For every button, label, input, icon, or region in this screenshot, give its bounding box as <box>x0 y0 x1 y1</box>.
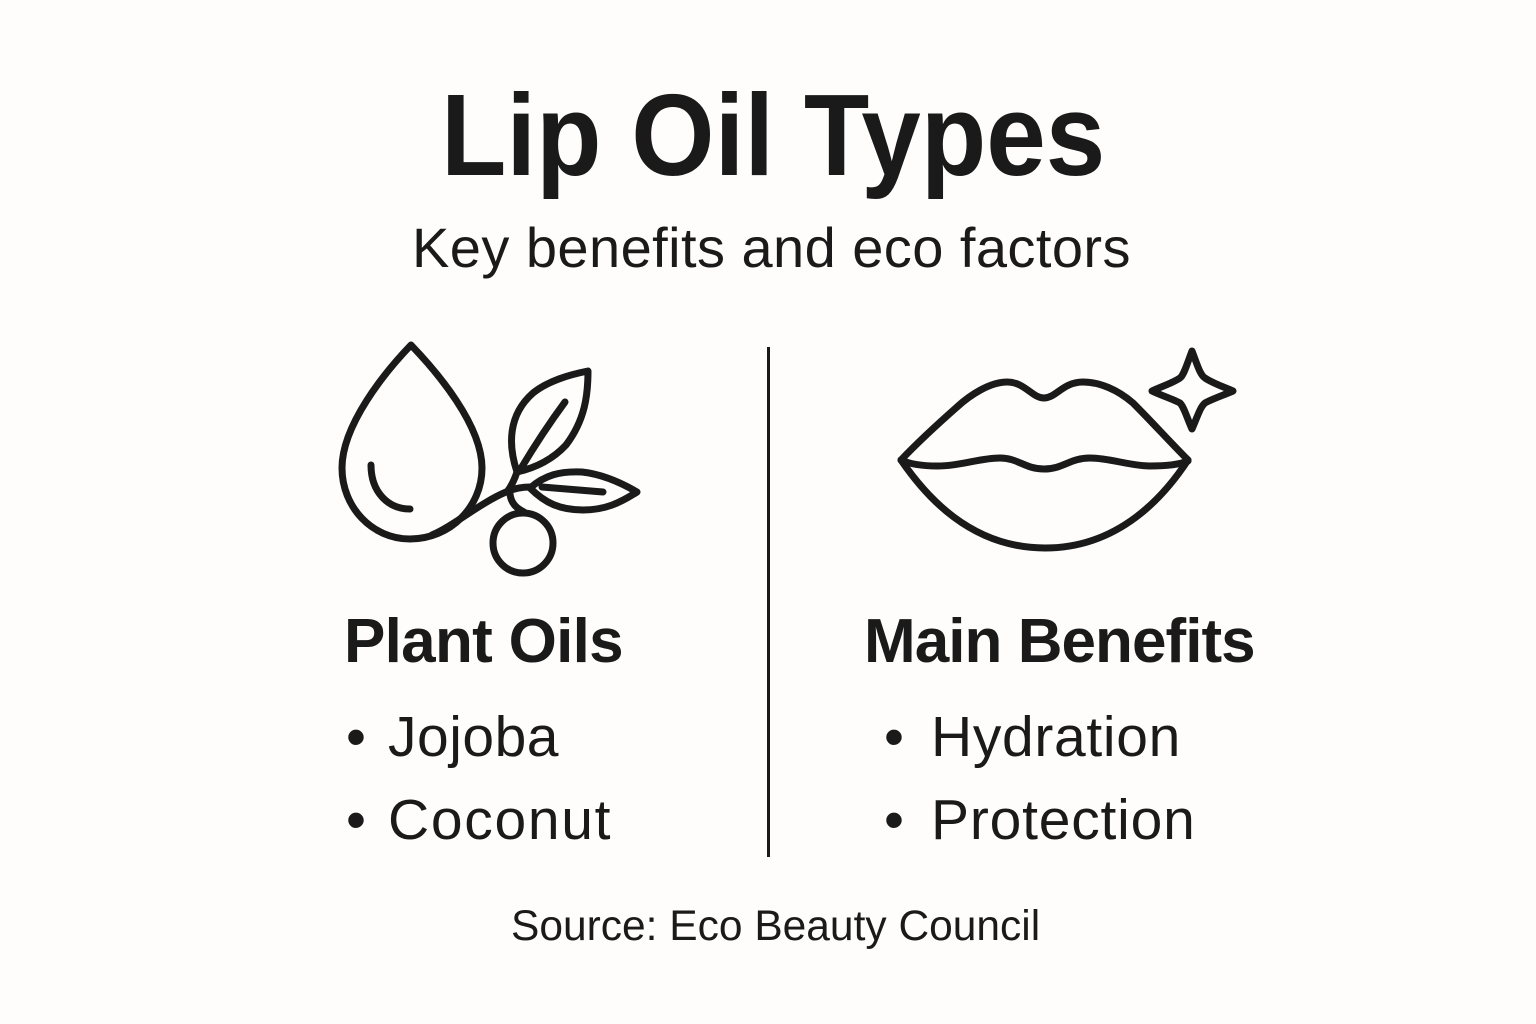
title: Lip Oil Types <box>441 70 1105 200</box>
heading: main benefits: Main Benefits <box>864 607 1255 676</box>
drop highlight <box>371 465 410 509</box>
icon: oil drop with leaves and berry <box>338 342 640 576</box>
sparkle <box>1152 351 1233 429</box>
list item: coconut: • <box>346 788 368 852</box>
stem <box>432 472 530 535</box>
list item: protection: Protection <box>931 788 1196 852</box>
divider <box>767 347 770 857</box>
list item: jojoba: Jojoba <box>388 704 559 768</box>
subtitle: Key benefits and eco factors <box>412 216 1131 279</box>
panel: main benefits <box>864 607 1255 852</box>
list item: protection: • <box>884 788 905 852</box>
source note: Source: Eco Beauty Council <box>511 903 1040 950</box>
lower leaf <box>530 472 637 510</box>
upper lip <box>901 382 1188 460</box>
list item: hydration: • <box>884 704 905 768</box>
upper leaf <box>512 371 588 472</box>
panel: plant oils <box>344 607 623 852</box>
oil drop <box>342 345 482 539</box>
list item: hydration: Hydration <box>931 704 1181 768</box>
mouth line <box>901 458 1188 469</box>
lower lip <box>901 460 1188 548</box>
berry <box>493 513 553 573</box>
list item: coconut: Coconut <box>388 788 612 852</box>
icon: lips with sparkle <box>898 348 1236 552</box>
heading: plant oils: Plant Oils <box>344 607 623 676</box>
list item: jojoba: • <box>346 704 366 768</box>
